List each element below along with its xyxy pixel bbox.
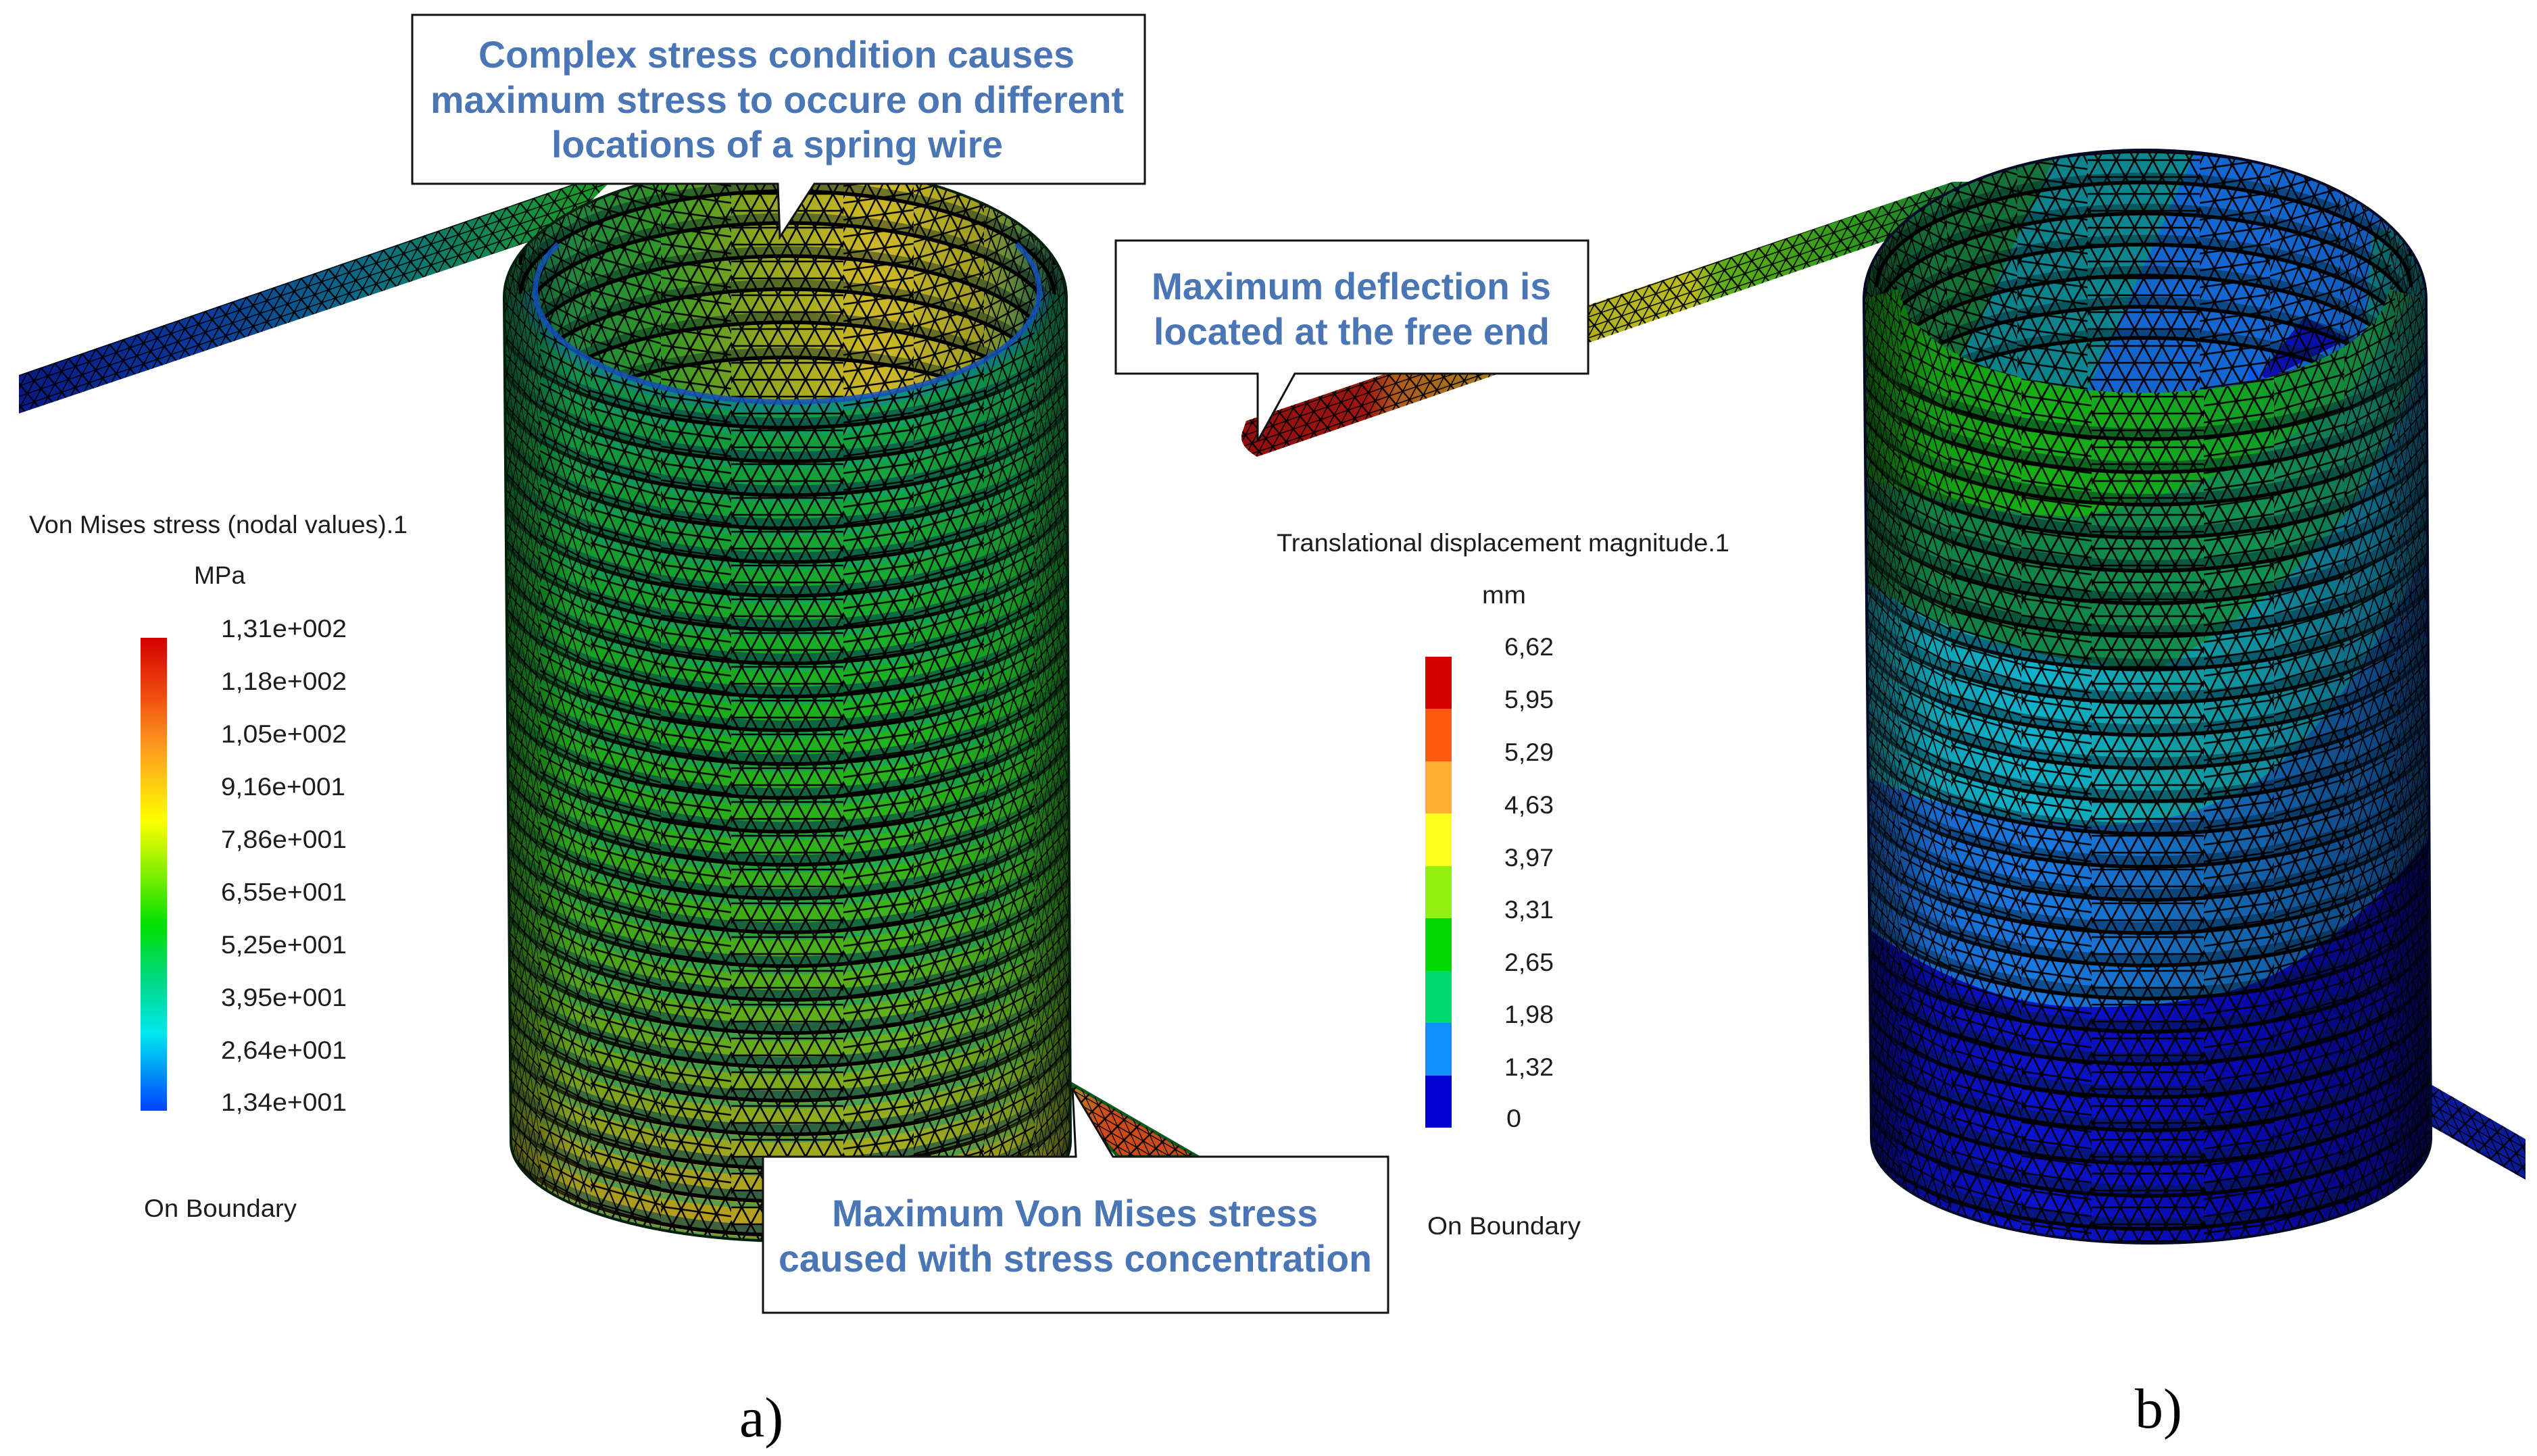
legend values: 2,64e+001 xyxy=(221,1036,347,1064)
top rim edge xyxy=(535,244,1039,402)
spring outer coils xyxy=(506,291,1069,1239)
legend values: 6,55e+001 xyxy=(221,878,347,906)
legend values: 1,18e+002 xyxy=(221,668,347,695)
legend values: 9,16e+001 xyxy=(221,773,345,801)
zone: blue xyxy=(1865,289,2428,1007)
lead wire top, stress spring xyxy=(19,184,608,413)
legend values: 3,31 xyxy=(1504,896,1554,924)
callout: maximum deflection: located at the free end xyxy=(1154,310,1550,353)
legend footer: On Boundary xyxy=(1427,1212,1581,1240)
legend: displacement xyxy=(1277,529,1729,1240)
legend values: 1,31e+002 xyxy=(221,615,347,643)
legend values: 1,32 xyxy=(1504,1053,1554,1081)
legend values: 5,25e+001 xyxy=(221,931,347,959)
legend values: 7,86e+001 xyxy=(221,826,347,853)
caption a: a) xyxy=(739,1386,783,1449)
callout: maximum deflection: Maximum deflection is xyxy=(1152,265,1551,307)
legend values: 0 xyxy=(1506,1105,1521,1132)
legend values: 6,62 xyxy=(1504,633,1554,661)
colour bar xyxy=(1425,657,1452,1128)
legend values: 3,97 xyxy=(1504,844,1554,872)
legend title: Von Mises stress (nodal values).1 xyxy=(29,511,408,538)
zone: teal xyxy=(1865,289,2426,826)
spring interior coils xyxy=(506,185,1065,402)
zone: dark green xyxy=(1865,289,2425,668)
legend title: Translational displacement magnitude.1 xyxy=(1277,529,1729,557)
legend footer: On Boundary xyxy=(144,1195,297,1222)
callout: maximum Von Mises stress: caused with stress concentration xyxy=(779,1237,1372,1280)
legend values: 2,65 xyxy=(1504,949,1554,976)
callout: maximum Von Mises stress: Maximum Von Mises stress xyxy=(832,1192,1318,1234)
colour bar xyxy=(141,638,167,1111)
panel a: Von Mises stress spring xyxy=(19,185,1199,1242)
legend unit: MPa xyxy=(194,561,245,589)
callout: complex stress condition: Complex stress condition causes xyxy=(478,33,1075,76)
legend values: 5,29 xyxy=(1504,738,1554,766)
lead wire free end xyxy=(1241,182,2000,457)
legend values: 3,95e+001 xyxy=(221,984,347,1011)
legend values xyxy=(221,615,347,1116)
zone: bright green xyxy=(1865,289,2415,517)
legend: Von Mises stress xyxy=(29,511,408,1222)
spring outer coils with displacement zones xyxy=(1865,289,2430,1242)
callout: maximum Von Mises stress xyxy=(763,1088,1388,1313)
legend values: 1,05e+002 xyxy=(221,720,347,748)
lead wire bottom xyxy=(2429,1084,2526,1180)
legend values xyxy=(1504,633,1554,1132)
callout: complex stress condition: locations of a spring wire xyxy=(551,123,1003,166)
spring interior coils xyxy=(1865,151,2425,393)
legend values: 1,34e+001 xyxy=(221,1088,347,1116)
callout: complex stress condition: maximum stress to occure on different xyxy=(430,78,1124,121)
legend unit: mm xyxy=(1482,581,1526,609)
spring outline xyxy=(504,166,1070,1241)
spring outline xyxy=(1864,150,2431,1243)
legend values: 4,63 xyxy=(1504,791,1554,819)
legend values: 5,95 xyxy=(1504,686,1554,713)
caption b: b) xyxy=(2135,1378,2182,1440)
panel b: displacement spring xyxy=(1241,149,2526,1245)
callout: maximum deflection xyxy=(1116,241,1588,441)
legend values: 1,98 xyxy=(1504,1001,1554,1028)
callout: complex stress condition xyxy=(412,15,1145,237)
lead wire bottom, stress concentration xyxy=(1073,1084,1198,1157)
